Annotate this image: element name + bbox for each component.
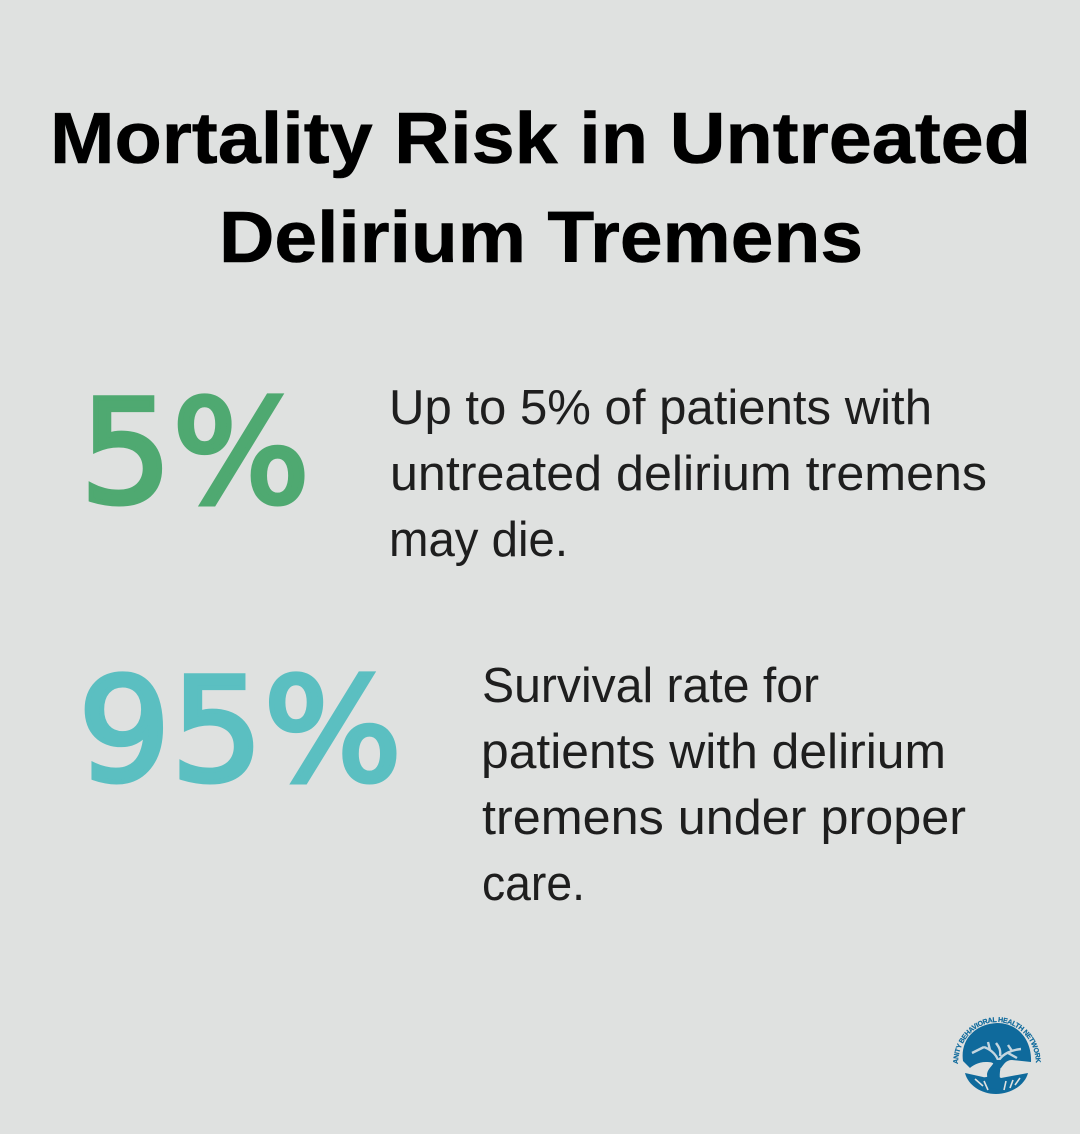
- logo tree trunk: [987, 1060, 1004, 1090]
- text block: 5% description: untreated delirium tremens: [390, 447, 987, 501]
- text block: 5% description: may die.: [389, 513, 568, 567]
- text block: 95% description: tremens under proper: [482, 791, 966, 845]
- logo roots bowl: [965, 1073, 1028, 1094]
- text block: 95% description: Survival rate for: [482, 659, 819, 713]
- title: Delirium Tremens: [219, 198, 863, 278]
- title: [50, 99, 1031, 278]
- text block: 95% description: [481, 659, 966, 911]
- text block: 95% description: patients with delirium: [481, 725, 946, 779]
- text block: 95% description: care.: [482, 857, 585, 911]
- logo wordmark: ANITY BEHAVIORAL HEALTH NETWORK: [953, 1017, 1041, 1064]
- logo root highlights: [975, 1078, 1020, 1090]
- text block: 5% description: [389, 381, 987, 567]
- logo tree branches: [972, 1042, 1021, 1064]
- statistic: 5%: 5%: [80, 369, 310, 536]
- logo tree canopy: [963, 1023, 1031, 1068]
- title: Mortality Risk in Untreated: [50, 99, 1031, 179]
- logo: Anity Behavioral Health Network: [953, 1017, 1041, 1094]
- text block: 5% description: Up to 5% of patients with: [389, 381, 932, 435]
- statistic: 95%: 95%: [78, 647, 402, 814]
